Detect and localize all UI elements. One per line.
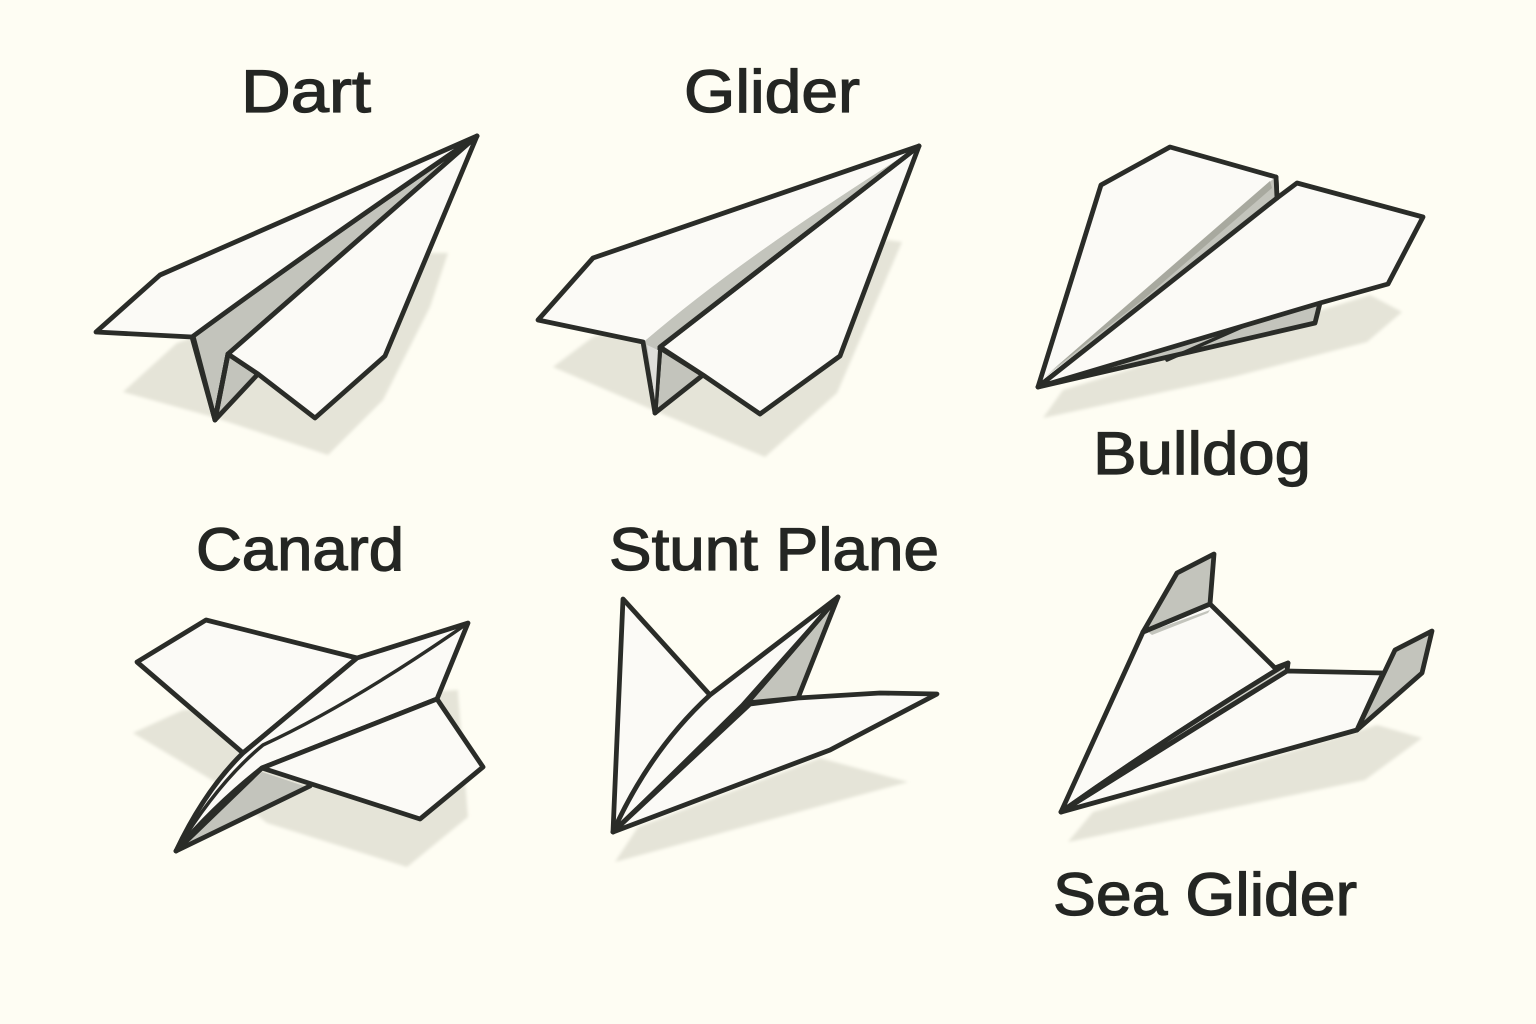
heading: Glider: Glider [684,58,860,125]
heading: Dart: Dart [241,58,371,125]
icon: Canard plane [133,620,483,867]
icon: Stunt Plane [613,597,937,862]
icon: Dart plane [96,136,477,455]
icon: Bulldog plane [1038,147,1423,418]
heading: Canard: Canard [196,516,404,583]
icon: Sea Glider plane [1061,554,1432,842]
heading: Bulldog: Bulldog [1093,420,1311,487]
icon: Glider plane [538,146,919,457]
heading: Sea Glider: Sea Glider [1053,861,1357,928]
heading: Stunt Plane: Stunt Plane [609,516,939,583]
